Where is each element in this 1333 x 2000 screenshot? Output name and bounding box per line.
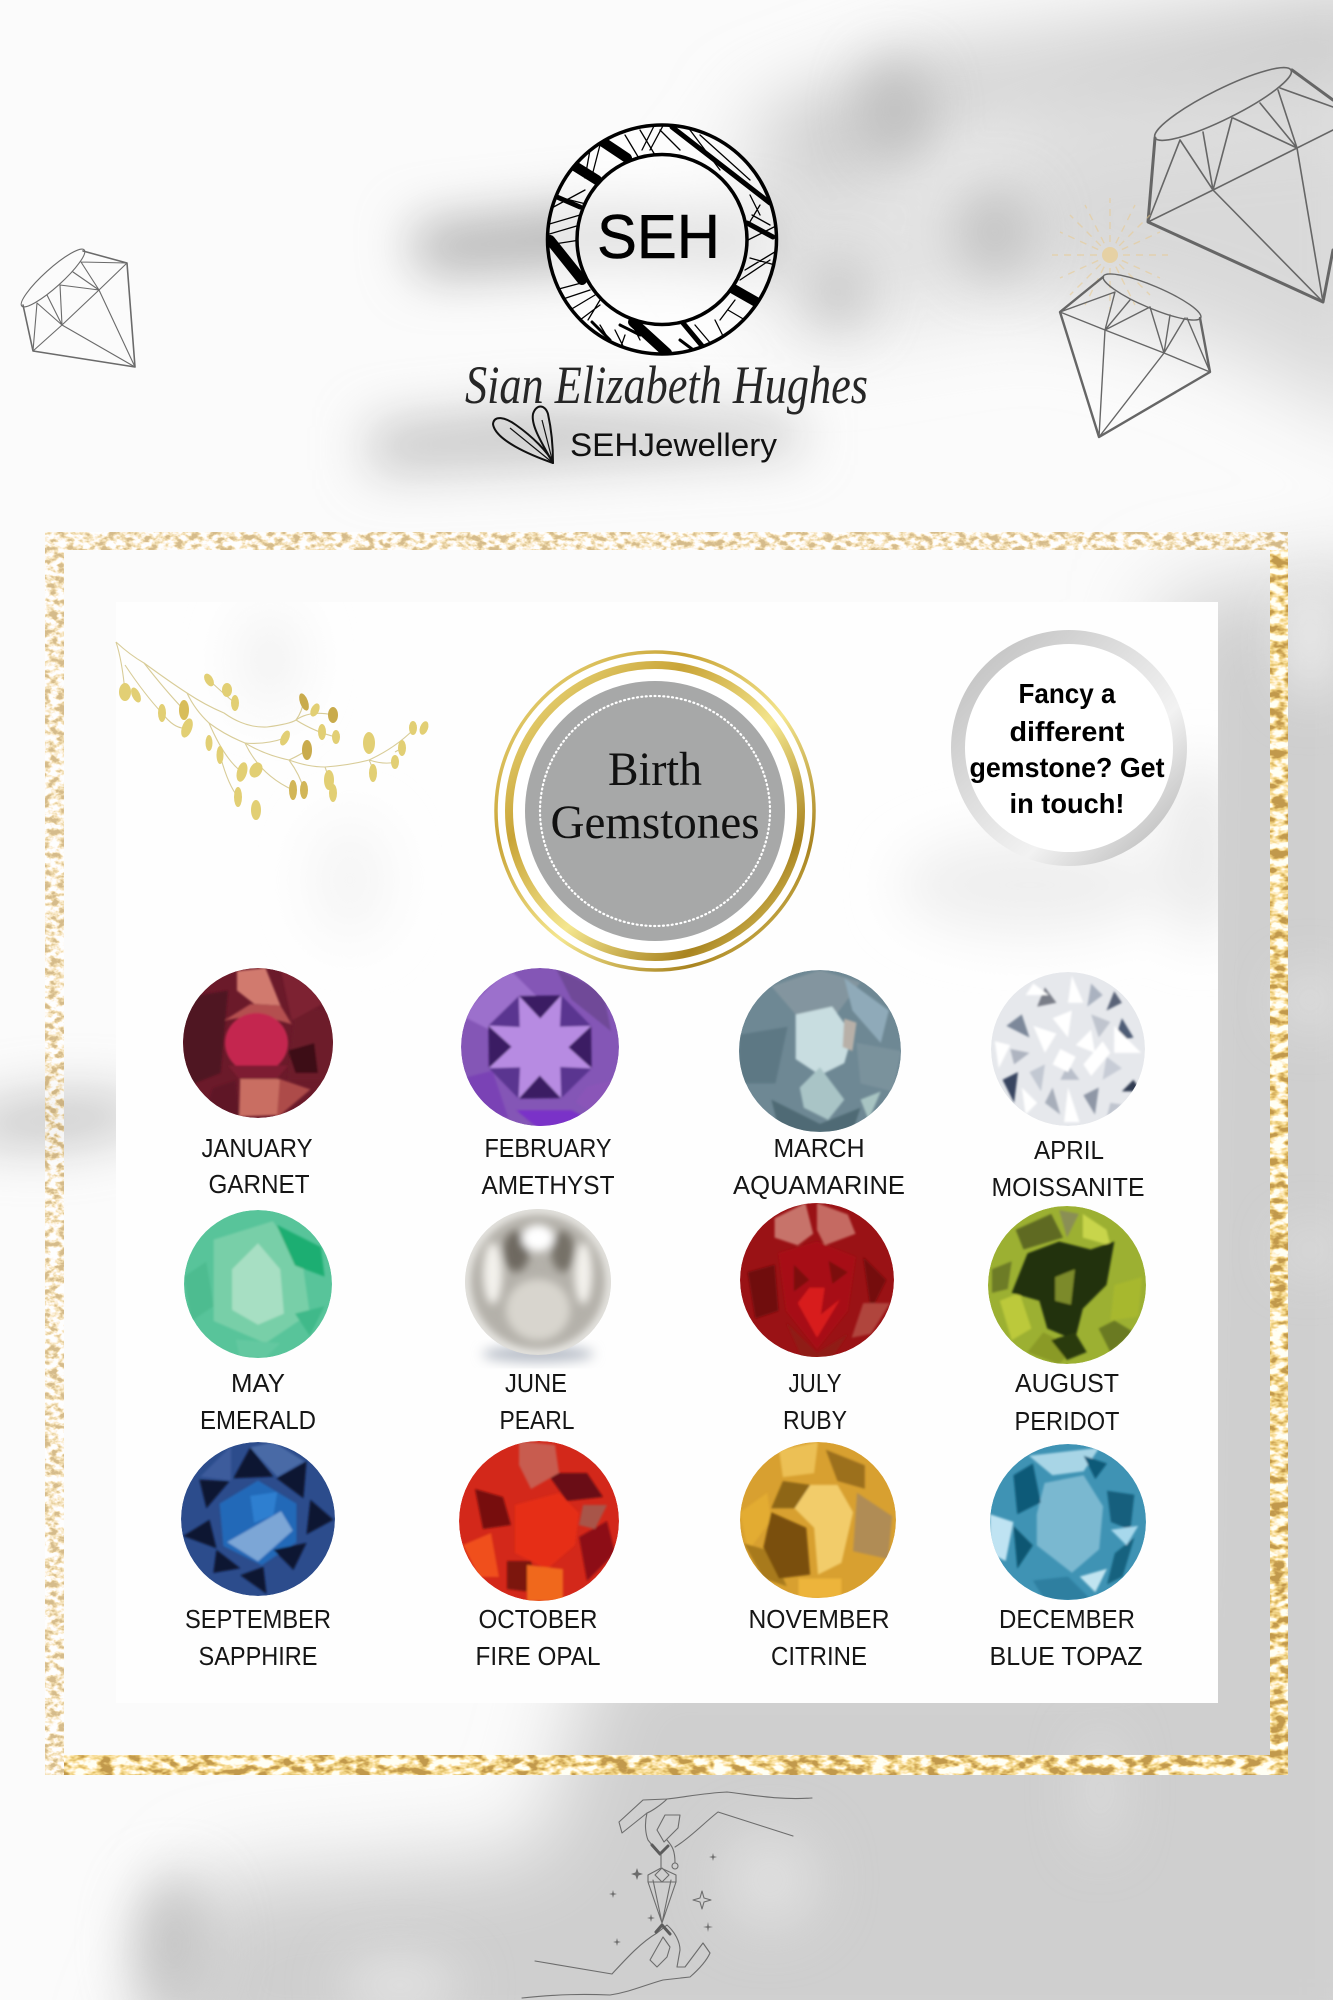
gem card: January garnet: JANUARY bbox=[202, 1133, 312, 1163]
panel: gold glitter frame bbox=[45, 532, 1288, 1775]
gem card: January garnet bbox=[183, 968, 333, 1199]
gem card: April moissanite: MOISSANITE bbox=[992, 1172, 1144, 1202]
gem card: September sapphire: SEPTEMBER bbox=[185, 1604, 331, 1634]
gem card: October fire opal: OCTOBER bbox=[478, 1604, 598, 1634]
gem card: November citrine bbox=[740, 1442, 896, 1671]
gem card: January garnet: GARNET bbox=[208, 1169, 310, 1199]
gem card: October fire opal: FIRE OPAL bbox=[476, 1641, 600, 1671]
heading: Birth Gemstones: Gemstones bbox=[550, 796, 760, 849]
icon: gold branch bbox=[116, 642, 430, 820]
gem card: September sapphire bbox=[181, 1442, 335, 1671]
gem card: February amethyst: AMETHYST bbox=[482, 1170, 615, 1200]
callout: Fancy a different gemstone: in touch! bbox=[1010, 788, 1124, 819]
gem card: November citrine: CITRINE bbox=[771, 1641, 867, 1671]
gem card: June pearl bbox=[465, 1209, 611, 1435]
icon: gold sparkle bbox=[1052, 198, 1168, 312]
logo: script name: Sian Elizabeth Hughes bbox=[465, 355, 868, 415]
icon: large diamond top right bbox=[1148, 57, 1333, 302]
gem card: August peridot: PERIDOT bbox=[1014, 1406, 1120, 1436]
gem card: August peridot bbox=[988, 1206, 1146, 1436]
logo: SEH ring bbox=[546, 122, 778, 356]
gem card: July ruby: RUBY bbox=[783, 1405, 847, 1435]
gem card: December blue topaz: BLUE TOPAZ bbox=[990, 1641, 1143, 1671]
logo ring texture strokes bbox=[546, 122, 778, 355]
badge: Birth Gemstones bbox=[496, 652, 814, 970]
icon: small diamond top right bbox=[1060, 266, 1210, 437]
lower hand bbox=[522, 1925, 710, 1998]
panel: white gemstone board bbox=[116, 602, 1240, 1703]
gem card: March aquamarine: MARCH bbox=[774, 1133, 864, 1163]
gem card: October fire opal bbox=[459, 1441, 619, 1671]
heading: Birth Gemstones bbox=[550, 743, 760, 849]
logo initials: SEH bbox=[597, 203, 720, 272]
gem card: November citrine: NOVEMBER bbox=[748, 1604, 890, 1634]
logo: brand name: SEHJewellery bbox=[570, 427, 777, 463]
heading: Birth Gemstones: Birth bbox=[608, 743, 702, 796]
gem card: July ruby: JULY bbox=[788, 1368, 842, 1398]
gem card: February amethyst bbox=[461, 968, 619, 1200]
icon: diamond top left bbox=[16, 243, 135, 367]
gem card: March aquamarine: AQUAMARINE bbox=[733, 1170, 905, 1200]
pendant gem bbox=[648, 1855, 676, 1923]
gem card: April moissanite bbox=[991, 972, 1145, 1202]
gem card: July ruby bbox=[740, 1203, 894, 1435]
gem card: May emerald: MAY bbox=[231, 1368, 285, 1398]
gem card: March aquamarine bbox=[733, 970, 905, 1200]
gem card: August peridot: AUGUST bbox=[1015, 1368, 1119, 1398]
callout: Fancy a different gemstone bbox=[958, 637, 1180, 859]
callout: Fancy a different gemstone: gemstone? Get bbox=[970, 752, 1164, 783]
gem card: June pearl: PEARL bbox=[500, 1405, 574, 1435]
gem card: December blue topaz: DECEMBER bbox=[999, 1604, 1135, 1634]
gem card: June pearl: JUNE bbox=[505, 1368, 567, 1398]
callout: Fancy a different gemstone: different bbox=[1010, 716, 1124, 747]
gem card: April moissanite: APRIL bbox=[1034, 1135, 1104, 1165]
gem card: May emerald: EMERALD bbox=[200, 1405, 316, 1435]
sparkles bbox=[609, 1853, 717, 1946]
gem card: May emerald bbox=[184, 1210, 332, 1435]
callout: Fancy a different gemstone: Fancy a bbox=[1018, 678, 1116, 709]
gem card: February amethyst: FEBRUARY bbox=[484, 1133, 612, 1163]
icon: logo leaves bbox=[493, 406, 553, 463]
upper hand bbox=[619, 1792, 812, 1869]
icon: hands holding gem pendant bbox=[522, 1792, 812, 1998]
gem card: December blue topaz bbox=[990, 1444, 1146, 1671]
gem card: September sapphire: SAPPHIRE bbox=[198, 1641, 318, 1671]
